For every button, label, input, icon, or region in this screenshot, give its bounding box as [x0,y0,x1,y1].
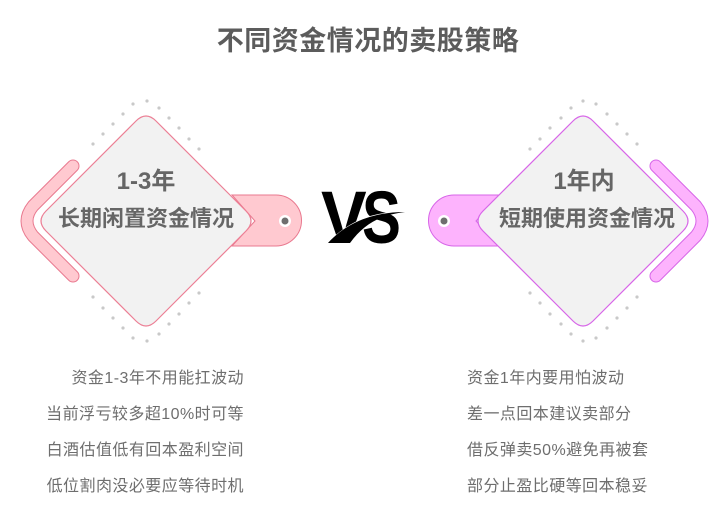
VS emblem [321,176,405,260]
list item: 部分止盈比硬等回本稳妥 [467,478,648,495]
list item: 差一点回本建议卖部分 [467,406,632,423]
VS emblem: S [362,177,401,260]
panel heading: 1年内 [553,168,615,195]
dotted ornament [528,99,639,343]
panel: long-term idle funds [27,99,302,343]
icon: pink chevron [27,166,73,276]
diamond card [41,116,251,326]
list item: 当前浮亏较多超10%时可等 [46,406,244,423]
list item: 借反弹卖50%避免再被套 [467,442,648,459]
icon: violet chevron [656,166,702,276]
panel subheading: 短期使用资金情况 [499,206,675,231]
list item: 白酒估值低有回本盈利空间 [47,442,244,459]
VS emblem: V [321,176,367,260]
icon: violet tab [429,195,500,246]
diamond card [478,116,688,326]
list item: 资金1-3年不用能扛波动 [71,370,244,387]
icon: pink tab [232,195,302,246]
panel subheading: 长期闲置资金情况 [58,206,234,231]
list item: 低位割肉没必要应等待时机 [47,478,244,495]
panel heading: 1-3年 [117,168,175,195]
dotted ornament [91,99,201,343]
title: 不同资金情况的卖股策略 [217,26,519,56]
list item: 资金1年内要用怕波动 [467,370,624,387]
panel: short-term funds [429,99,702,343]
